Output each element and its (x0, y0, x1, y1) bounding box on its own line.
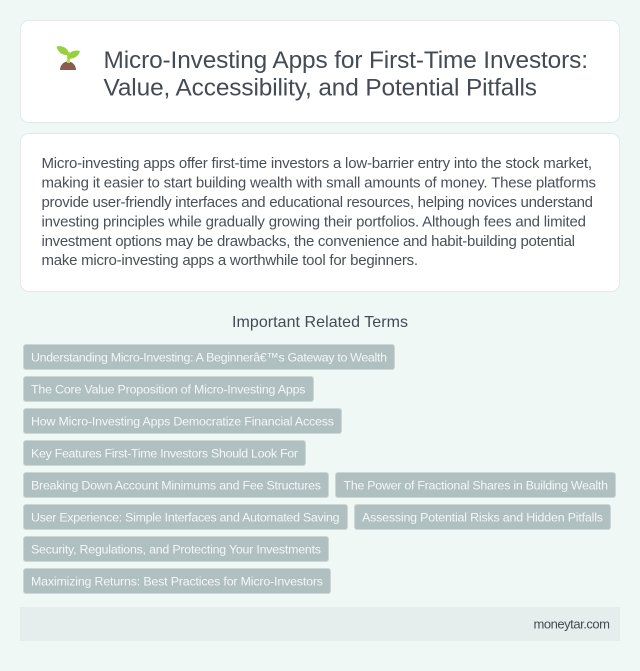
panel: header card (20, 20, 620, 122)
tag 10: Maximizing Returns: Best Practices for Micro-Investors (31, 574, 323, 588)
tag 9: Security, Regulations, and Protecting Your Investments (31, 542, 321, 556)
title: Value, Accessibility, and Potential Pitfalls (104, 74, 537, 102)
text block: summary: make micro-investing apps a worthwhile tool for beginners. (42, 252, 418, 269)
tag 2 (24, 376, 314, 402)
tag 7 (24, 504, 348, 530)
tag 5 (24, 472, 328, 498)
text block: summary: Micro-investing apps offer first-time investors a low-barrier entry into the stock market, (42, 155, 592, 172)
text block: summary: investment options may be drawbacks, the convenience and habit-building potential (42, 233, 575, 250)
tag 3: How Micro-Investing Apps Democratize Financial Access (31, 414, 334, 428)
panel: summary card (20, 134, 620, 292)
tag 6 (336, 472, 616, 498)
tag 10 (24, 568, 330, 594)
footer text: site name: moneytar.com (534, 616, 610, 632)
tag 9 (24, 536, 328, 562)
text block: summary: making it easier to start building wealth with small amounts of money. These platforms (42, 174, 596, 192)
tag 1 (24, 344, 394, 370)
footer bar (20, 607, 620, 641)
tag 3 (24, 408, 342, 434)
text block: summary (42, 155, 596, 269)
heading: important related terms: Important Related Terms (232, 314, 408, 331)
tag 4: Key Features First-Time Investors Should Look For (31, 446, 298, 460)
text block: summary: investing principles while gradually growing their portfolios. Although fees and limited (42, 214, 586, 230)
tag 4 (24, 440, 306, 466)
text block: summary: provide user-friendly interfaces and educational resources, helping novices understand (42, 194, 593, 211)
tag 1: Understanding Micro-Investing: A Beginnerâ€™s Gateway to Wealth (31, 350, 387, 364)
tag 6: The Power of Fractional Shares in Building Wealth (344, 478, 608, 492)
tag 7: User Experience: Simple Interfaces and Automated Saving (31, 510, 340, 524)
tag 5: Breaking Down Account Minimums and Fee Structures (31, 478, 321, 492)
tag 8 (354, 504, 610, 530)
icon: seedling (56, 46, 80, 70)
title (104, 47, 588, 102)
tag list (24, 344, 616, 594)
title: Micro-Investing Apps for First-Time Investors: (104, 47, 588, 74)
tag 8: Assessing Potential Risks and Hidden Pitfalls (362, 510, 603, 524)
tag 2: The Core Value Proposition of Micro-Investing Apps (31, 382, 306, 396)
